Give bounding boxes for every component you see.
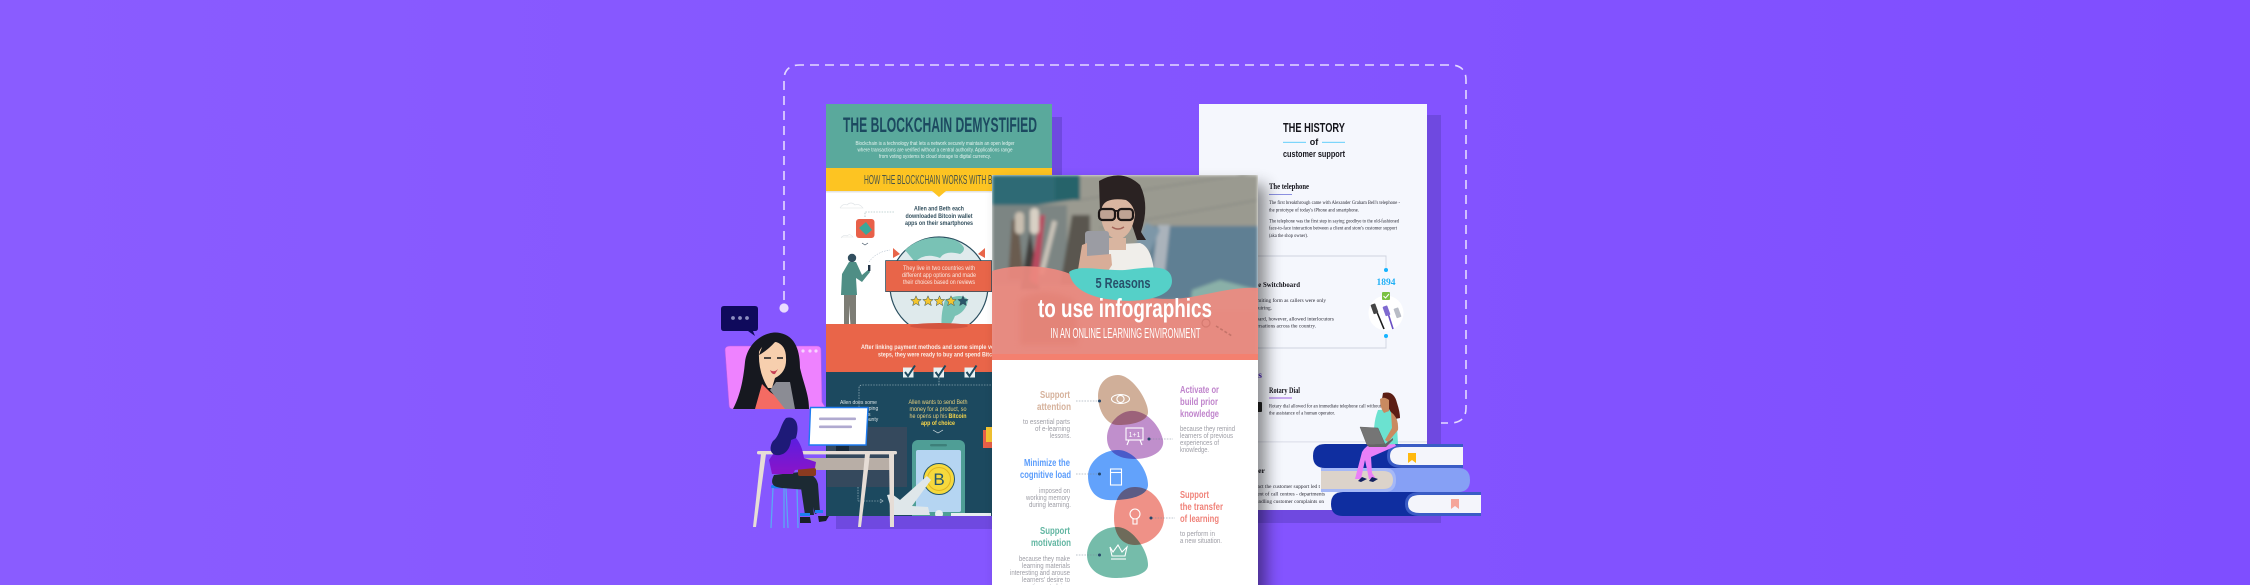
section: rotary dial: Rotary Dial <box>1269 386 1301 395</box>
ribbon <box>886 261 992 292</box>
reason: support transfer: a new situation. <box>1180 538 1222 545</box>
reason: minimize cognitive load: imposed on <box>1039 488 1070 495</box>
section: rotary dial: the assistance of a human operator. <box>1269 410 1335 416</box>
blob icons <box>1110 394 1143 559</box>
section: switchboard: The switchboard, however, allowed interlocutors <box>1230 316 1334 322</box>
step text left: ounty <box>866 417 879 423</box>
section: rotary dial: Rotary dial allowed for an immediate telephone call without <box>1269 402 1381 410</box>
reason: support motivation: interesting and arouse <box>1010 570 1070 577</box>
reason: support transfer <box>1180 489 1223 545</box>
desk with woman at monitor <box>753 408 897 528</box>
section: rotary dial: 1920s <box>1239 371 1262 381</box>
blockchain header: THE BLOCKCHAIN DEMYSTIFIED <box>843 114 1037 137</box>
blockchain header: from voting systems to cloud storage to digital currency. <box>879 154 991 160</box>
checkboxes <box>903 366 976 378</box>
speech bubble <box>721 306 758 336</box>
section: call centre <box>1236 466 1325 505</box>
top book <box>1313 444 1463 468</box>
step text <box>905 206 973 227</box>
book stack with reader <box>1313 392 1481 516</box>
teal blob badge: 5 Reasons <box>1096 276 1150 292</box>
reason: activate prior knowledge <box>1180 384 1235 454</box>
blob: prior knowledge <box>1107 411 1163 459</box>
reason: support transfer: of learning <box>1180 513 1219 525</box>
panel: blockchain infographic card <box>826 104 1052 530</box>
phone with bitcoin: B <box>933 470 945 489</box>
photo: woman with phone at desk <box>992 172 1258 360</box>
section: call centre: teams handling customer complaints on <box>1240 499 1324 505</box>
blob: cognitive load <box>1088 450 1148 500</box>
history title: customer support <box>1283 149 1346 160</box>
reason: minimize cognitive load: during learning. <box>1029 502 1071 509</box>
decorative clouds <box>840 203 863 238</box>
woman at desk <box>769 417 829 523</box>
globe <box>890 236 988 324</box>
blob stack <box>1087 375 1164 578</box>
step text centre: Allen wants to send Beth <box>908 399 968 406</box>
video call window with woman <box>725 332 829 413</box>
reason: support transfer: Support <box>1180 489 1209 501</box>
section: switchboard: conducting conversations across the country. <box>1221 324 1316 330</box>
section: rotary dial <box>1239 371 1427 442</box>
section: call centre: Dialer <box>1244 466 1266 475</box>
middle book <box>1321 468 1470 492</box>
blob: transfer <box>1114 487 1164 545</box>
person with phone <box>841 250 890 324</box>
reason: support attention: of e-learning <box>1035 426 1070 433</box>
reason: support motivation: Support <box>1040 525 1070 537</box>
blockchain header: Blockchain is a technology that lets a network securely maintain an open ledger <box>856 141 1015 147</box>
reason: support attention: lessons. <box>1050 433 1071 440</box>
teal blob badge <box>1069 268 1172 301</box>
step text centre <box>908 399 968 433</box>
cable icon <box>1368 292 1404 330</box>
section: the telephone: The first breakthrough came with Alexander Graham Bell's telephone - <box>1269 199 1400 206</box>
section: call centre: development of call centres - departments <box>1236 490 1325 498</box>
step text: downloaded Bitcoin wallet <box>906 213 973 220</box>
section: switchboard <box>1221 282 1334 330</box>
step text centre: app of choice <box>921 420 955 427</box>
reason: support motivation <box>1010 525 1071 585</box>
reason: support attention: Support <box>1040 389 1070 401</box>
history title: THE HISTORY <box>1283 121 1345 135</box>
section: the telephone: the prototype of today's iPhone and smartphone. <box>1269 206 1359 214</box>
reason: minimize cognitive load: working memory <box>1025 495 1070 502</box>
dashed connector frame <box>779 65 1466 428</box>
reason: activate prior knowledge: Activate or <box>1180 384 1219 396</box>
step text left: pping <box>866 406 878 412</box>
monitor <box>809 408 868 451</box>
reason: activate prior knowledge: build prior <box>1180 396 1218 408</box>
yellow banner <box>826 168 1052 324</box>
card shadows <box>836 115 1441 529</box>
blockchain header: where transactions are verified without a central authority. Applications range <box>857 148 1012 154</box>
step text left: s <box>868 412 871 418</box>
orange band <box>826 323 992 372</box>
orange band: steps, they were ready to buy and spend Bitcoin <box>878 352 1000 358</box>
reason: support motivation: because they make <box>1019 556 1070 563</box>
timeline 1894: 1894 <box>1376 278 1396 288</box>
icon: wallet card <box>856 212 895 245</box>
timeline 1894 <box>1258 256 1396 348</box>
section: switchboard: Telephone Switchboard <box>1232 282 1300 289</box>
section: the telephone: (aka the shop owner). <box>1269 232 1308 239</box>
dark teal section <box>826 372 992 516</box>
reason: minimize cognitive load: Minimize the <box>1024 457 1070 469</box>
reason: activate prior knowledge: experiences of <box>1180 440 1219 447</box>
section: the telephone: The telephone was the first step in saying goodbye to the old-fashioned <box>1269 218 1399 224</box>
section: the telephone: face-to-face interaction between a client and store's customer support <box>1269 224 1397 232</box>
reason: support motivation: learning materials <box>1022 563 1070 570</box>
blob icons: 1+1 <box>1129 432 1141 439</box>
salmon wave header <box>992 266 1258 360</box>
ribbon: They live in two countries with <box>903 266 975 272</box>
step text centre: money for a product, so <box>910 406 967 413</box>
reason: activate prior knowledge: because they remind <box>1180 426 1235 433</box>
reason: support attention: to essential parts <box>1023 419 1070 426</box>
history title: of <box>1310 137 1319 147</box>
section: switchboard: enquiring. <box>1250 306 1272 312</box>
ribbon: different app options and made <box>902 273 977 279</box>
reason: support attention <box>1023 389 1071 440</box>
desk <box>753 451 897 527</box>
panel: 5 reasons infographic card <box>992 172 1258 585</box>
section: switchboard: was used a limiting form as callers were only <box>1230 297 1326 304</box>
rating stars <box>911 296 968 306</box>
blob leader lines <box>1076 400 1175 556</box>
step text: apps on their smartphones <box>905 220 973 227</box>
reason: minimize cognitive load <box>1020 457 1071 509</box>
reason: support transfer: the transfer <box>1180 501 1223 513</box>
blob: motivation <box>1087 527 1148 578</box>
panel: customer support history card <box>1199 104 1427 510</box>
blob: attention <box>1098 375 1148 425</box>
reason: support motivation: learners' desire to <box>1022 577 1070 584</box>
step text centre: he opens up his Bitcoin <box>910 413 967 420</box>
section: call centre: To contact the customer support led t <box>1242 484 1321 490</box>
reader <box>1355 392 1400 482</box>
reason: activate prior knowledge: learners of previous <box>1180 433 1233 440</box>
section: the telephone <box>1269 182 1400 239</box>
reason: support transfer: to perform in <box>1180 531 1215 538</box>
section: the telephone: The telephone <box>1269 182 1309 191</box>
stool <box>771 485 800 528</box>
tag <box>983 427 992 448</box>
woman in photo <box>1078 175 1154 270</box>
phone with bitcoin <box>912 440 991 516</box>
blockchain header <box>826 104 1052 168</box>
orange band: After linking payment methods and some simple verification <box>861 344 1017 351</box>
pointing hand <box>887 476 931 515</box>
center card shadow <box>1002 185 1266 585</box>
main title: to use infographics <box>1038 293 1212 323</box>
step text: Allen and Beth each <box>914 206 964 212</box>
ribbon: their choices based on reviews <box>903 280 975 286</box>
reason: minimize cognitive load: cognitive load <box>1020 469 1071 481</box>
reason: activate prior knowledge: knowledge <box>1180 408 1219 420</box>
reason: activate prior knowledge: knowledge. <box>1180 447 1209 454</box>
reason: support attention: attention <box>1037 401 1071 413</box>
history title <box>1283 121 1346 160</box>
reason: support motivation: motivation <box>1031 537 1071 549</box>
subtitle: IN AN ONLINE LEARNING ENVIRONMENT <box>1050 325 1200 342</box>
yellow banner: HOW THE BLOCKCHAIN WORKS WITH BITCOIN <box>864 172 1015 187</box>
step text left: Allen does some <box>840 400 877 406</box>
step text left <box>840 400 879 423</box>
bottom book <box>1331 492 1481 516</box>
